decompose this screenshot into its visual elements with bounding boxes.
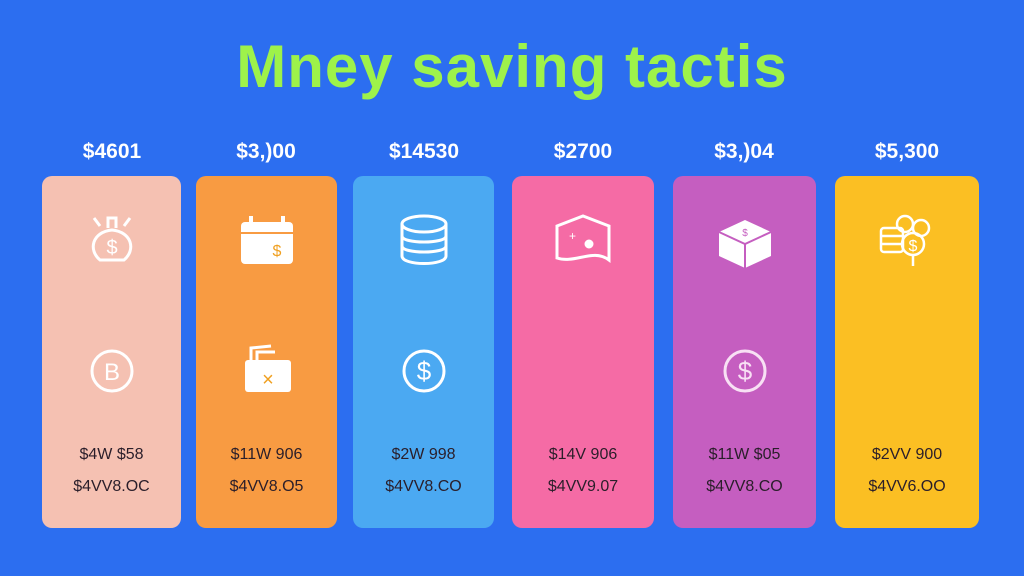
icon: money bag: $ xyxy=(106,237,117,259)
icon: money bag xyxy=(92,216,132,262)
icon: dollar circle xyxy=(402,350,446,392)
icon: box xyxy=(719,220,771,268)
icon: landscape xyxy=(556,214,610,263)
icon: B coin: B xyxy=(103,359,120,386)
text rows xyxy=(230,446,303,495)
icon: B coin xyxy=(90,350,134,392)
title: Mney saving tactis xyxy=(236,33,788,100)
text rows xyxy=(868,446,946,495)
text rows: $4VV8.CO xyxy=(706,478,783,495)
value label 1: $4601 xyxy=(83,140,141,163)
panel 2 xyxy=(196,176,337,528)
text rows xyxy=(73,446,150,495)
value label 5: $3,)04 xyxy=(714,140,774,163)
icon: coin stack xyxy=(400,214,448,265)
value label 3: $14530 xyxy=(389,140,459,163)
text rows xyxy=(548,446,618,495)
icon: dollar circle: $ xyxy=(737,356,752,386)
text rows: $11W 906 xyxy=(231,446,302,463)
text rows xyxy=(706,446,783,495)
text rows: $4VV6.OO xyxy=(868,478,946,495)
icon: dollar circle xyxy=(724,350,766,392)
icon: wallet x xyxy=(245,344,291,392)
value label 4: $2700 xyxy=(554,140,612,163)
panel 1 xyxy=(42,176,181,528)
icon: dollar circle: $ xyxy=(416,356,431,386)
text rows: $4VV8.CO xyxy=(385,478,462,495)
icon: wallet x: × xyxy=(262,369,273,391)
text rows: $4VV8.OC xyxy=(73,478,150,495)
icon: landscape: + xyxy=(569,229,576,243)
icon: coins: $ xyxy=(909,238,918,255)
text rows: $2VV 900 xyxy=(872,446,942,463)
panel 6 xyxy=(835,176,979,528)
text rows: $4W $58 xyxy=(79,446,144,463)
text rows: $4VV9.07 xyxy=(548,478,618,495)
text rows: $4VV8.O5 xyxy=(230,478,303,495)
text rows: $11W $05 xyxy=(709,446,780,463)
icon: calendar xyxy=(241,216,293,264)
icon: coins xyxy=(880,214,930,266)
icon: box: $ xyxy=(742,228,748,239)
icon: calendar: $ xyxy=(272,243,281,260)
text rows: $14V 906 xyxy=(549,446,617,463)
value label 6: $5,300 xyxy=(875,140,939,163)
text rows: $2W 998 xyxy=(391,446,456,463)
value label 2: $3,)00 xyxy=(236,140,296,163)
panel 4 xyxy=(512,176,654,528)
panel 5 xyxy=(673,176,816,528)
text rows xyxy=(385,446,462,495)
panel 3 xyxy=(353,176,494,528)
